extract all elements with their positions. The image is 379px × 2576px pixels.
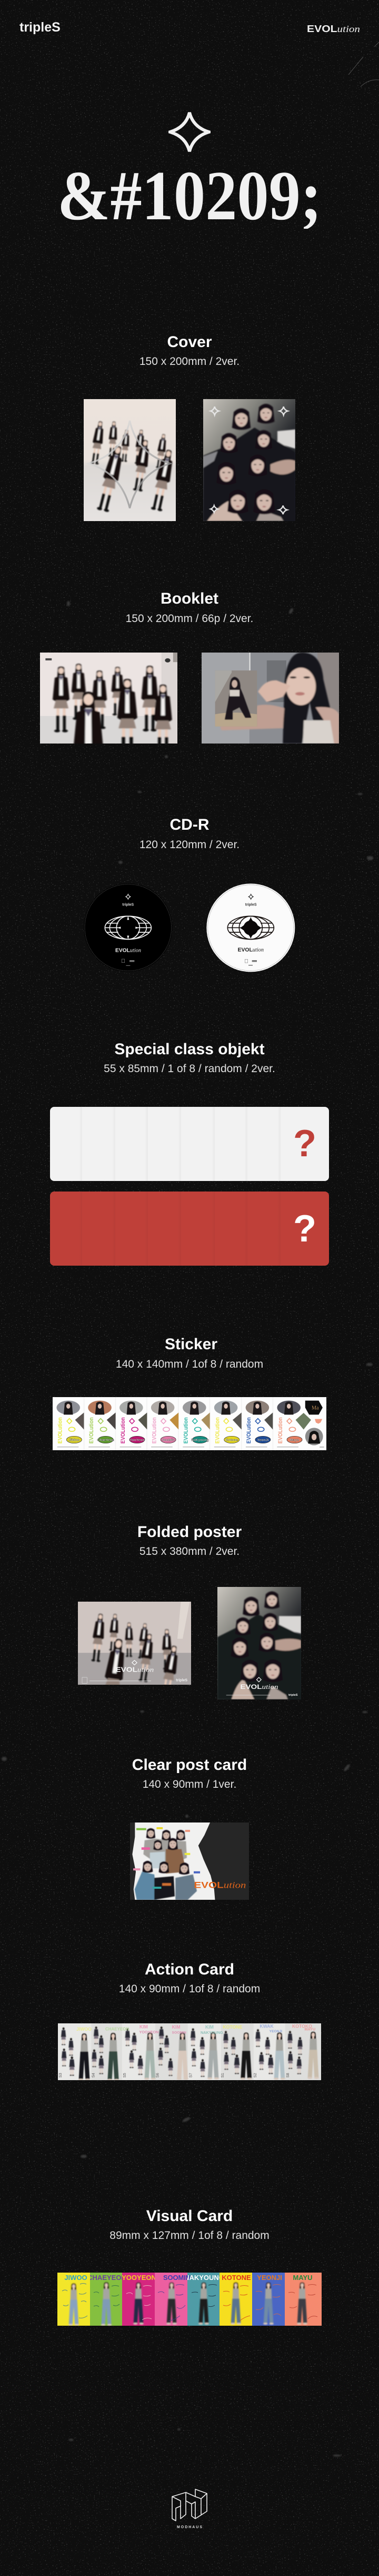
action cards strip: S1 bbox=[220, 2073, 225, 2078]
sticker sheets strip: EVOLution bbox=[214, 1417, 221, 1443]
header: EVOLution logo: EVOL ution bbox=[307, 24, 360, 34]
photo: booklet spread 2 bbox=[202, 653, 339, 744]
visual cards strip: NAKYOUNG bbox=[184, 2274, 224, 2282]
photo: clear post card bbox=[130, 1822, 249, 1900]
sticker sheets strip: EVOLution bbox=[57, 1417, 64, 1443]
visual cards strip: JIWOO bbox=[64, 2274, 87, 2282]
action cards strip: JIWOO bbox=[76, 2027, 92, 2032]
action cards strip: KIM bbox=[172, 2024, 181, 2030]
section heading: CD-R: CD-R bbox=[169, 816, 210, 833]
action cards strip: KIM bbox=[139, 2024, 148, 2029]
section heading: Folded poster: Folded poster bbox=[137, 1523, 242, 1541]
action cards strip: S7 bbox=[188, 2073, 193, 2078]
action cards strip: KOTONE bbox=[223, 2024, 242, 2030]
photo: folded poster version 1: tripleS bbox=[176, 1679, 187, 1683]
section detail: Folded poster: 515 x 380mm / 2ver. bbox=[139, 1545, 240, 1557]
sticker sheets strip bbox=[53, 1397, 326, 1450]
visual cards strip: SOOMIN bbox=[163, 2274, 191, 2282]
disc: white CD-R: EVOLution bbox=[238, 948, 264, 953]
logo: Modhaus: MODHAUS bbox=[177, 2526, 202, 2529]
sticker sheets strip: JiWoo bbox=[69, 1438, 79, 1442]
action cards strip: NAKYOUNG bbox=[201, 2030, 223, 2035]
action cards strip bbox=[58, 2023, 321, 2080]
sticker sheets strip: SooMin bbox=[162, 1438, 175, 1442]
photo: folded poster version 2: tripleS bbox=[288, 1694, 298, 1697]
action cards strip: SOOMIN bbox=[172, 2031, 186, 2034]
disc: white CD-R: tripleS bbox=[245, 903, 257, 907]
photo: folded poster version 1 bbox=[78, 1602, 232, 1685]
section heading: Visual Card: Visual Card bbox=[146, 2207, 233, 2225]
sticker sheets strip: EVOLution bbox=[120, 1417, 126, 1443]
action cards strip: CHAEYEON bbox=[105, 2027, 129, 2031]
section detail: Booklet: 150 x 200mm / 66p / 2ver. bbox=[126, 613, 253, 625]
sticker sheets strip: Mayu bbox=[290, 1438, 299, 1442]
action cards strip: S3 bbox=[58, 2073, 63, 2078]
section heading: Special class objekt: Special class objekt bbox=[114, 1041, 265, 1058]
action cards strip: YOOYEON bbox=[139, 2030, 158, 2034]
logo: Modhaus bbox=[172, 2489, 207, 2529]
sticker sheets strip: YeonJi bbox=[257, 1438, 268, 1442]
photo: clear post card: EVOLution bbox=[194, 1880, 246, 1890]
section detail: Clear post card: 140 x 90mm / 1ver. bbox=[143, 1778, 236, 1790]
photo: cover version 1 bbox=[84, 399, 176, 521]
section detail: Sticker: 140 x 140mm / 1of 8 / random bbox=[116, 1358, 263, 1370]
sticker sheets strip: ChaeYeon bbox=[97, 1438, 114, 1442]
action cards strip: S4 bbox=[91, 2073, 96, 2078]
photo: booklet spread 1 bbox=[40, 653, 324, 744]
disc: white CD-R bbox=[142, 883, 295, 972]
panel: red objekt cards bbox=[50, 1192, 329, 1266]
sticker sheets strip: Kotone bbox=[226, 1438, 238, 1442]
action cards strip: MAYU bbox=[304, 2027, 315, 2031]
disc: black CD-R bbox=[84, 883, 292, 972]
disc: black CD-R: EVOLution bbox=[115, 948, 141, 953]
action cards strip: S2 bbox=[253, 2073, 257, 2078]
header: tripleS wordmark: tripleS bbox=[19, 20, 61, 35]
section detail: Cover: 150 x 200mm / 2ver. bbox=[139, 355, 240, 368]
photo: folded poster version 2: EVOLution bbox=[240, 1683, 278, 1691]
sticker sheets strip: EVOLution bbox=[183, 1417, 189, 1443]
visual cards strip: MAYU bbox=[293, 2274, 313, 2282]
section detail: Special class objekt: 55 x 85mm / 1 of 8 / random / 2ver. bbox=[104, 1063, 275, 1075]
sticker sheets strip: EVOLution bbox=[277, 1417, 284, 1443]
section heading: Cover: Cover bbox=[167, 333, 212, 351]
action cards strip: S6 bbox=[155, 2073, 160, 2078]
action cards strip: S5 bbox=[122, 2073, 127, 2078]
sticker sheets strip: NaKyoung bbox=[191, 1438, 209, 1442]
section detail: Action Card: 140 x 90mm / 1of 8 / random bbox=[119, 1983, 260, 1995]
visual cards strip: CHAEYEON bbox=[87, 2274, 126, 2282]
section detail: CD-R: 120 x 120mm / 2ver. bbox=[139, 839, 240, 851]
visual cards strip bbox=[57, 2273, 322, 2326]
photo: folded poster version 2 bbox=[217, 1587, 301, 1699]
disc: black CD-R: tripleS bbox=[122, 903, 134, 907]
action cards strip: KWAK bbox=[260, 2023, 274, 2029]
icon: four-point diamond bbox=[168, 112, 211, 152]
photo: cover version 2 bbox=[203, 399, 295, 521]
section heading: Booklet: Booklet bbox=[161, 590, 218, 607]
sticker sheets strip: Ma bbox=[312, 1405, 319, 1411]
section heading: Action Card: Action Card bbox=[145, 1961, 234, 1978]
photo: folded poster version 1: EVOLution bbox=[115, 1666, 154, 1674]
section detail: Visual Card: 89mm x 127mm / 1of 8 / random bbox=[109, 2229, 270, 2242]
action cards strip: KIM bbox=[205, 2024, 214, 2030]
panel: white objekt cards bbox=[50, 1107, 329, 1181]
sticker sheets strip: EVOLution bbox=[246, 1417, 252, 1443]
sticker sheets strip: YooYeon bbox=[129, 1438, 145, 1442]
icon: red question mark: ? bbox=[293, 1123, 316, 1165]
icon: white question mark: ? bbox=[293, 1208, 316, 1250]
action cards strip: KOTOKO bbox=[292, 2023, 312, 2029]
section heading: Sticker: Sticker bbox=[165, 1336, 217, 1353]
action cards strip: S8 bbox=[285, 2073, 290, 2078]
sticker sheets strip: EVOLution bbox=[152, 1417, 158, 1443]
action cards strip: YEONJI bbox=[270, 2030, 282, 2033]
visual cards strip: YOOYEON bbox=[122, 2274, 156, 2282]
section heading: Clear post card: Clear post card bbox=[132, 1756, 247, 1774]
sticker sheets strip: EVOLution bbox=[88, 1417, 95, 1443]
visual cards strip: KOTONE bbox=[222, 2274, 251, 2282]
visual cards strip: YEONJI bbox=[257, 2274, 282, 2282]
